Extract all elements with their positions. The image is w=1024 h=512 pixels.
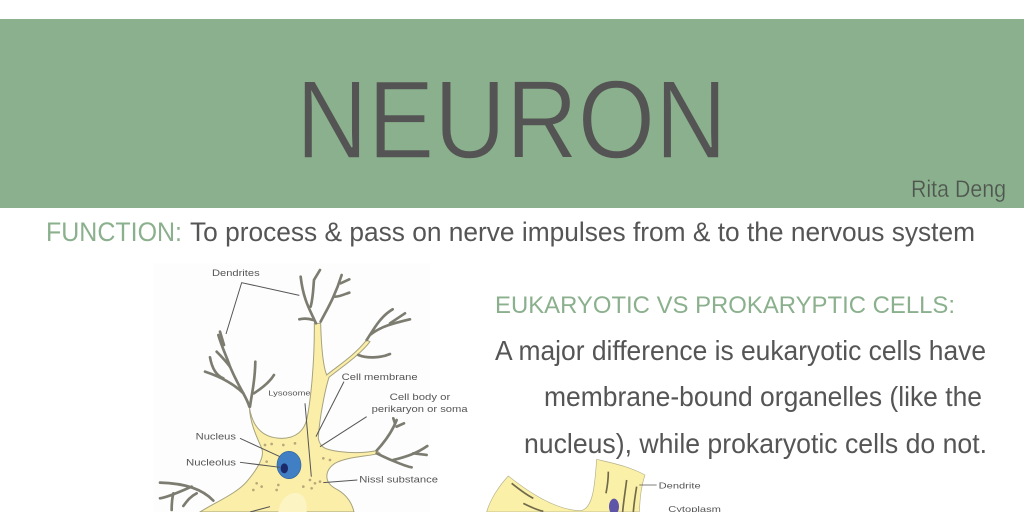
axon hillock — [278, 493, 307, 512]
cell comparison text: nucleus), while prokaryotic cells do not. — [524, 428, 987, 459]
diagram labels: Nissl substance — [359, 475, 438, 485]
fibres — [512, 472, 637, 512]
header banner — [0, 19, 1024, 208]
nucleus — [609, 499, 619, 512]
nucleolus — [281, 463, 288, 473]
title: NEURON — [296, 58, 727, 182]
diagram labels: Nucleolus — [186, 457, 237, 467]
leader lines — [226, 283, 367, 512]
dendrites — [160, 270, 427, 510]
diagram labels: perikaryon or soma — [372, 404, 468, 414]
cell comparison text: membrane-bound organelles (like the — [544, 381, 982, 412]
cell comparison heading: EUKARYOTIC VS PROKARYPTIC CELLS: — [495, 292, 955, 319]
diagram labels — [186, 268, 468, 485]
cell comparison text: A major difference is eukaryotic cells have — [495, 335, 986, 366]
nissl substance dots — [252, 442, 331, 491]
nucleus — [277, 451, 301, 479]
neuron diagram — [153, 263, 468, 512]
author: Rita Deng — [911, 176, 1006, 203]
labels — [659, 481, 721, 512]
function statement: FUNCTION: — [46, 217, 182, 247]
neuron cell body — [200, 323, 380, 512]
diagram labels: Nucleus — [196, 431, 237, 441]
diagram labels: Cell body or — [390, 392, 450, 402]
labels: Dendrite — [659, 481, 701, 491]
function statement: To process & pass on nerve impulses from & to the nervous system — [190, 217, 975, 247]
cell comparison text — [495, 335, 987, 459]
diagram labels: Cell membrane — [342, 372, 418, 382]
leader line — [639, 484, 657, 486]
cell cytoplasm — [487, 459, 645, 512]
diagram labels: Dendrites — [212, 268, 260, 278]
second neuron diagram — [487, 459, 721, 512]
diagram labels: Lysosome — [268, 388, 311, 397]
